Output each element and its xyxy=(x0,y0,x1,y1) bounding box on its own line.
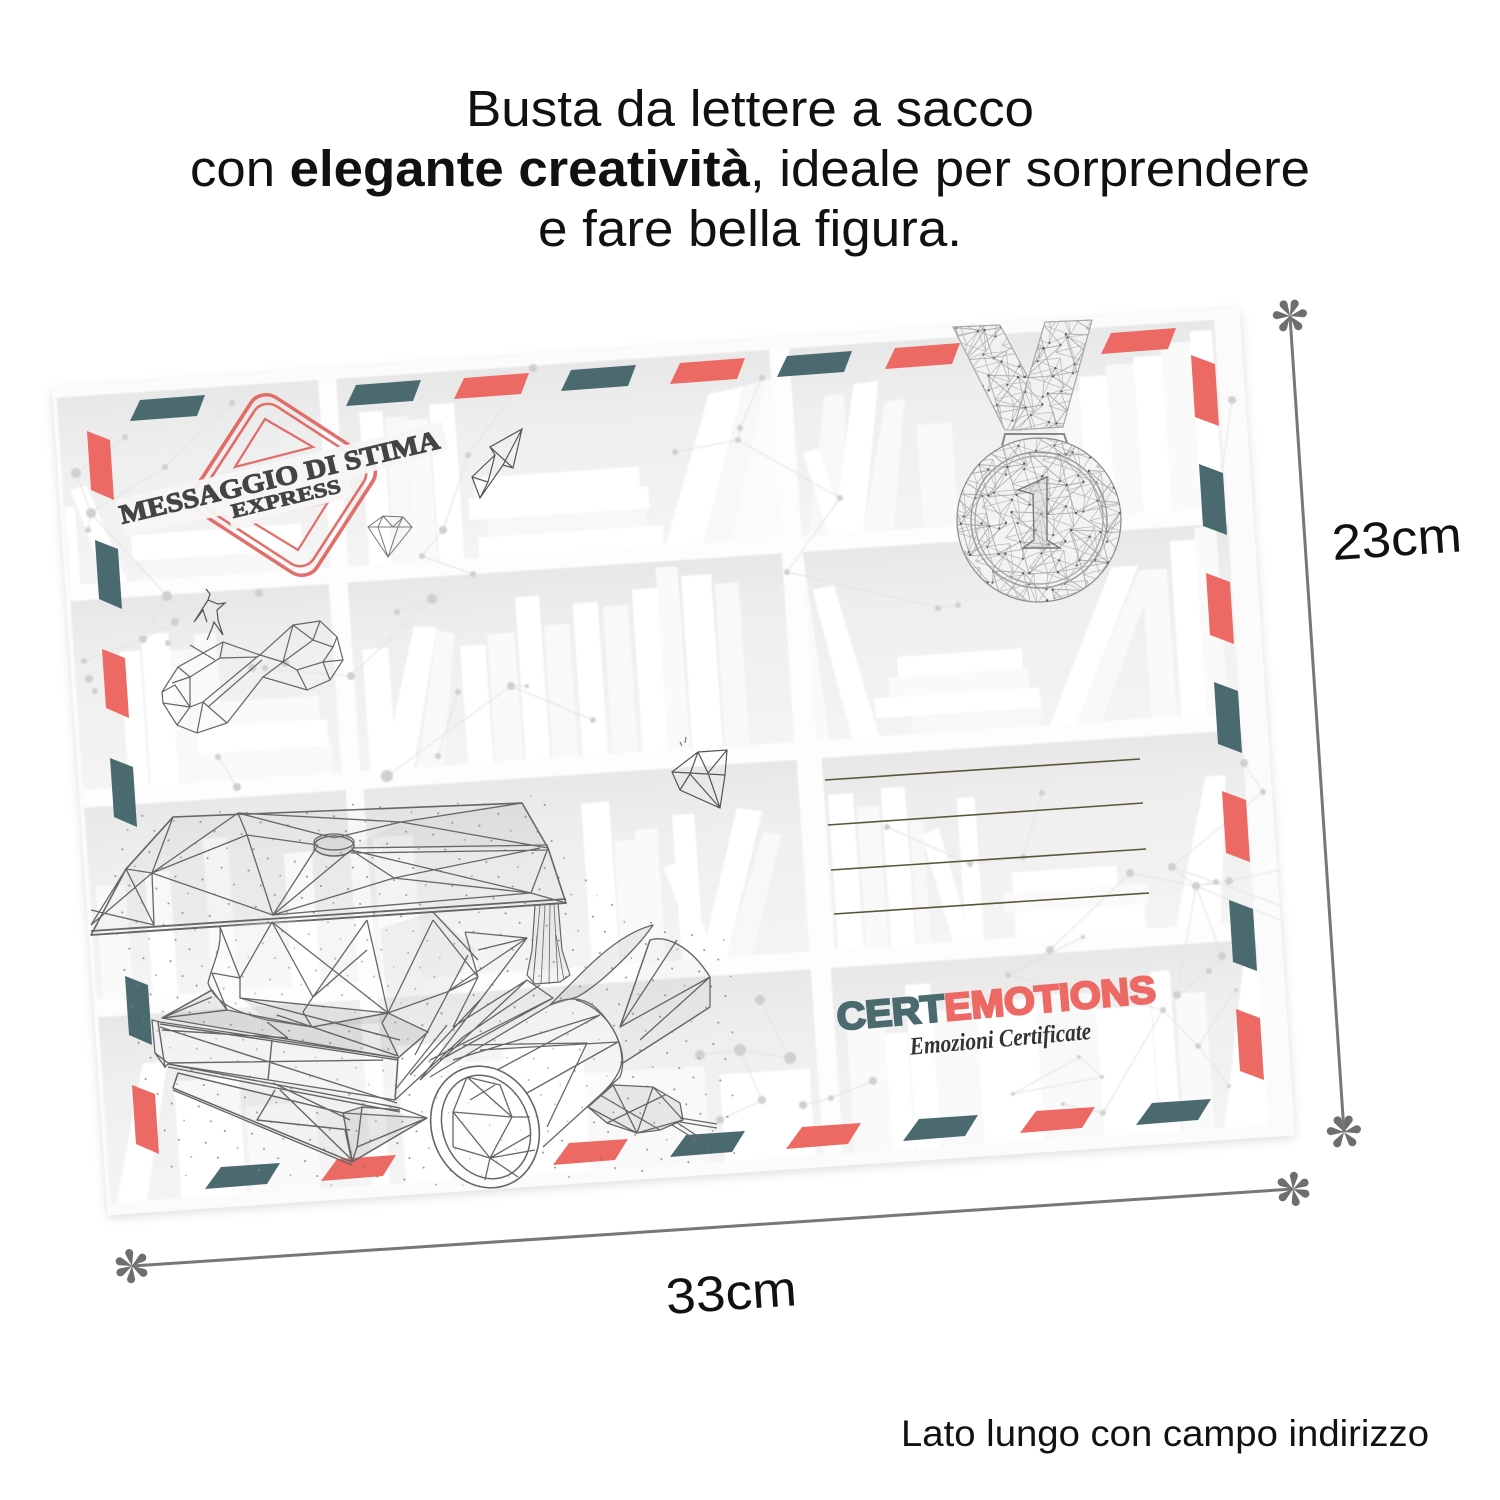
airmail stripes left xyxy=(87,431,159,1154)
dimension: height 23cm xyxy=(1271,297,1463,1150)
figure on infinity xyxy=(194,589,225,640)
airmail stripes bottom xyxy=(205,1099,1211,1189)
title: Busta da lettere a sacco xyxy=(466,80,1034,137)
tassel xyxy=(527,903,570,984)
speckle xyxy=(90,790,740,1190)
network dots and lines xyxy=(71,364,1280,1124)
medal ribbon xyxy=(953,320,1092,430)
logo: certemotions: Emozioni Certificate xyxy=(908,1018,1092,1061)
dimension: width 33cm: 33cm xyxy=(664,1260,798,1325)
dimension: height 23cm: 23cm xyxy=(1330,506,1463,571)
stamp: messaggio di stima express xyxy=(116,388,448,582)
stamp: messaggio di stima express: EXPRESS xyxy=(229,476,343,523)
address lines xyxy=(825,759,1149,914)
lower book xyxy=(173,1073,427,1165)
bookshelf background xyxy=(52,308,1295,1215)
title: con elegante creatività , ideale per sorprendere xyxy=(190,140,1310,197)
logo: certemotions xyxy=(835,969,1160,1067)
icon: large gem xyxy=(672,737,727,808)
lower cap crown xyxy=(208,912,527,1080)
icon: arrow xyxy=(472,429,522,498)
airmail stripes top xyxy=(130,328,1176,421)
airmail stripes right xyxy=(1191,355,1264,1080)
upper book xyxy=(152,990,428,1112)
stamp: messaggio di stima express: MESSAGGIO DI STIMA xyxy=(116,425,443,530)
icon: medal xyxy=(953,320,1121,602)
caption: Lato lungo con campo indirizzo xyxy=(901,1413,1429,1454)
envelope xyxy=(52,308,1295,1215)
logo: certemotions: CERTEMOTIONS xyxy=(835,969,1158,1039)
title: e fare bella figura. xyxy=(538,200,962,257)
icon: infinity with figure xyxy=(162,589,343,733)
icon: graduation cap, books and scroll xyxy=(90,790,740,1204)
leaf xyxy=(588,1085,717,1142)
icon: small gem xyxy=(368,516,412,557)
dimension: width 33cm xyxy=(113,1170,1312,1325)
title xyxy=(190,80,1310,257)
scroll xyxy=(395,925,710,1204)
graduation cap xyxy=(91,803,566,935)
